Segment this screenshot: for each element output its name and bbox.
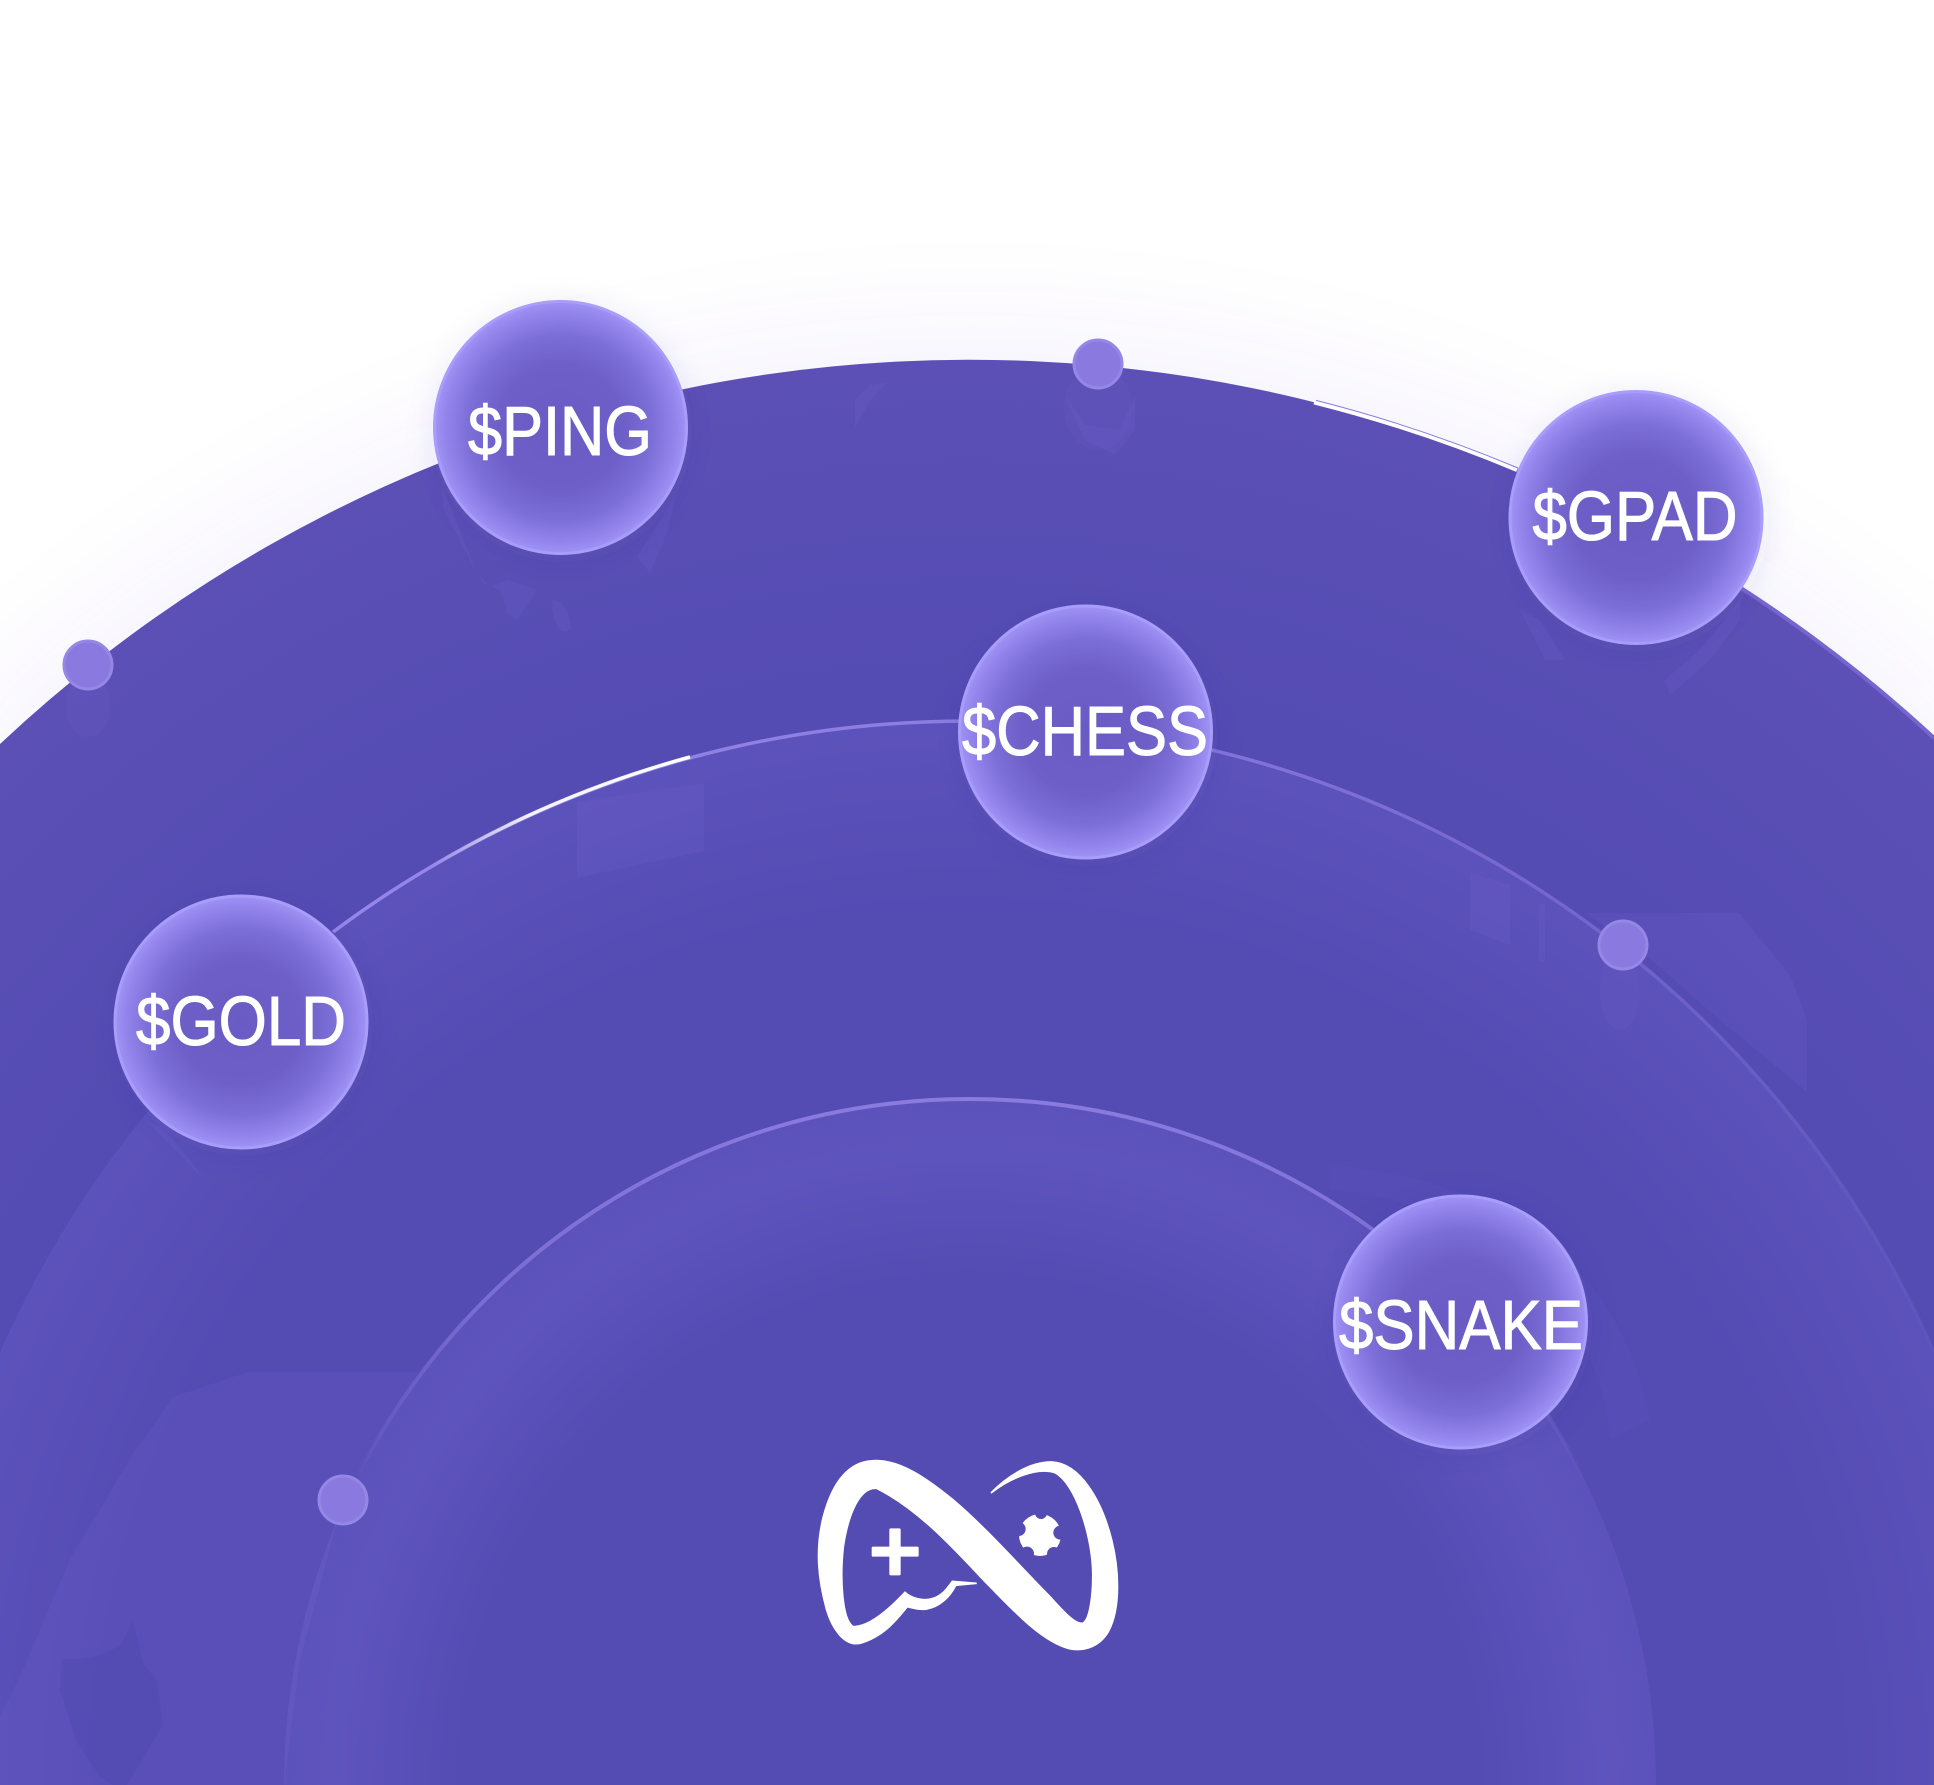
token: $SNAKE [1332, 1196, 1592, 1456]
highlight arc on middle orbit [430, 757, 690, 867]
token: $GPAD [1508, 392, 1768, 652]
small node: top centre [1064, 340, 1132, 450]
inner orbit disc [284, 1099, 1656, 1785]
token: $GPAD: $GPAD [1532, 477, 1738, 555]
small node: right [1599, 921, 1647, 1030]
token: $CHESS [957, 606, 1217, 866]
token: $GOLD: $GOLD [136, 982, 346, 1060]
faint artefact patches [0, 382, 1807, 1785]
token: $SNAKE: $SNAKE [1339, 1286, 1583, 1364]
background glow above the dome [0, 360, 1934, 1785]
small node: top left [64, 641, 112, 737]
highlight arc on outer orbit [1314, 400, 1518, 470]
middle orbit disc [0, 721, 1934, 1785]
token: $PING [432, 302, 692, 562]
token: $GOLD [113, 896, 373, 1156]
logo: infinity game controller [819, 1461, 1117, 1650]
outer orbit dome [0, 360, 1934, 1785]
token: $CHESS: $CHESS [962, 692, 1208, 770]
small node: lower left [319, 1476, 367, 1524]
token: $PING: $PING [468, 392, 652, 470]
